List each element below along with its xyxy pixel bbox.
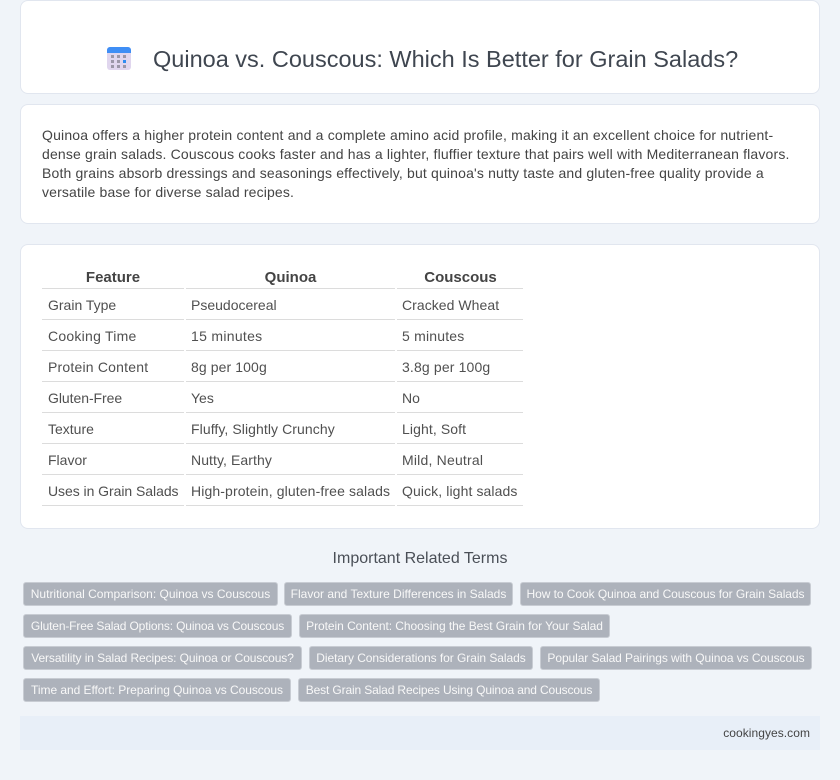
row: protein: 3.8g per 100g [402, 359, 490, 375]
tag [284, 582, 513, 606]
tag [309, 646, 533, 670]
tag [540, 646, 812, 670]
row: uses: Quick, light salads [402, 483, 518, 499]
row: uses: Uses in Grain Salads [48, 483, 179, 499]
column headers: Couscous [424, 269, 497, 286]
row: gluten-free: No [402, 390, 420, 406]
row: protein [48, 359, 490, 375]
related term tags [23, 582, 812, 702]
tag: Versatility in Salad Recipes: Quinoa or Couscous? [31, 651, 294, 665]
row: cooking time: 15 minutes [191, 328, 262, 344]
row: grain type: Cracked Wheat [402, 297, 499, 313]
row: texture: Fluffy, Slightly Crunchy [191, 421, 335, 437]
tag [23, 646, 302, 670]
tag: Flavor and Texture Differences in Salads [291, 587, 506, 601]
icon: calendar [107, 47, 131, 70]
column headers [86, 269, 497, 286]
table panel [20, 244, 820, 529]
row: grain type [48, 297, 500, 313]
tag [23, 678, 291, 702]
tag: Popular Salad Pairings with Quinoa vs Couscous [547, 651, 805, 665]
tag: How to Cook Quinoa and Couscous for Grain Salads [527, 587, 804, 601]
footer bar [20, 716, 820, 750]
row: texture: Texture [48, 421, 94, 437]
header panel [20, 0, 820, 94]
tag: Dietary Considerations for Grain Salads [316, 651, 526, 665]
row: flavor [48, 452, 483, 468]
intro text: dense grain salads. Couscous cooks faster and has a lighter, fluffier texture that pairs well with Mediterranean flavors. [42, 146, 790, 162]
row: texture: Light, Soft [402, 421, 466, 437]
row: flavor: Nutty, Earthy [191, 452, 272, 468]
tag: Best Grain Salad Recipes Using Quinoa and Couscous [306, 683, 592, 697]
row: cooking time: Cooking Time [48, 328, 137, 344]
row: flavor: Flavor [48, 452, 87, 468]
row: gluten-free: Yes [191, 390, 214, 406]
comparison table [42, 269, 523, 506]
intro text: Both grains absorb dressings and seasonings effectively, but quinoa's nutty taste and gluten-free quality provide a [42, 165, 764, 181]
row: gluten-free [48, 390, 420, 406]
intro panel [20, 104, 820, 224]
tag [520, 582, 811, 606]
row: protein: 8g per 100g [191, 359, 267, 375]
tag [23, 582, 278, 606]
tag [299, 614, 610, 638]
row: texture [48, 421, 466, 437]
column headers: Quinoa [265, 269, 316, 286]
tag: Time and Effort: Preparing Quinoa vs Couscous [31, 683, 283, 697]
row: grain type: Pseudocereal [191, 297, 277, 313]
footer source: cookingyes.com [723, 726, 810, 740]
row: protein: Protein Content [48, 359, 148, 375]
intro text: versatile base for diverse salad recipes. [42, 184, 294, 200]
row: flavor: Mild, Neutral [402, 452, 483, 468]
tag: Gluten-Free Salad Options: Quinoa vs Couscous [31, 619, 284, 633]
intro text: Quinoa offers a higher protein content and a complete amino acid profile, making it an excellent choice for nutrient- [42, 127, 773, 143]
row: grain type: Grain Type [48, 297, 116, 313]
title: Quinoa vs. Couscous: Which Is Better for Grain Salads? [153, 46, 738, 72]
tag: Nutritional Comparison: Quinoa vs Couscous [31, 587, 270, 601]
tag [23, 614, 292, 638]
row: uses [48, 483, 518, 499]
row: uses: High-protein, gluten-free salads [191, 483, 390, 499]
tag [298, 678, 600, 702]
row: cooking time: 5 minutes [402, 328, 464, 344]
column headers: Feature [86, 269, 140, 286]
row: gluten-free: Gluten-Free [48, 390, 122, 406]
row: cooking time [48, 328, 464, 344]
tag: Protein Content: Choosing the Best Grain for Your Salad [306, 619, 603, 633]
intro text [42, 127, 790, 200]
related terms heading: Important Related Terms [333, 550, 507, 567]
